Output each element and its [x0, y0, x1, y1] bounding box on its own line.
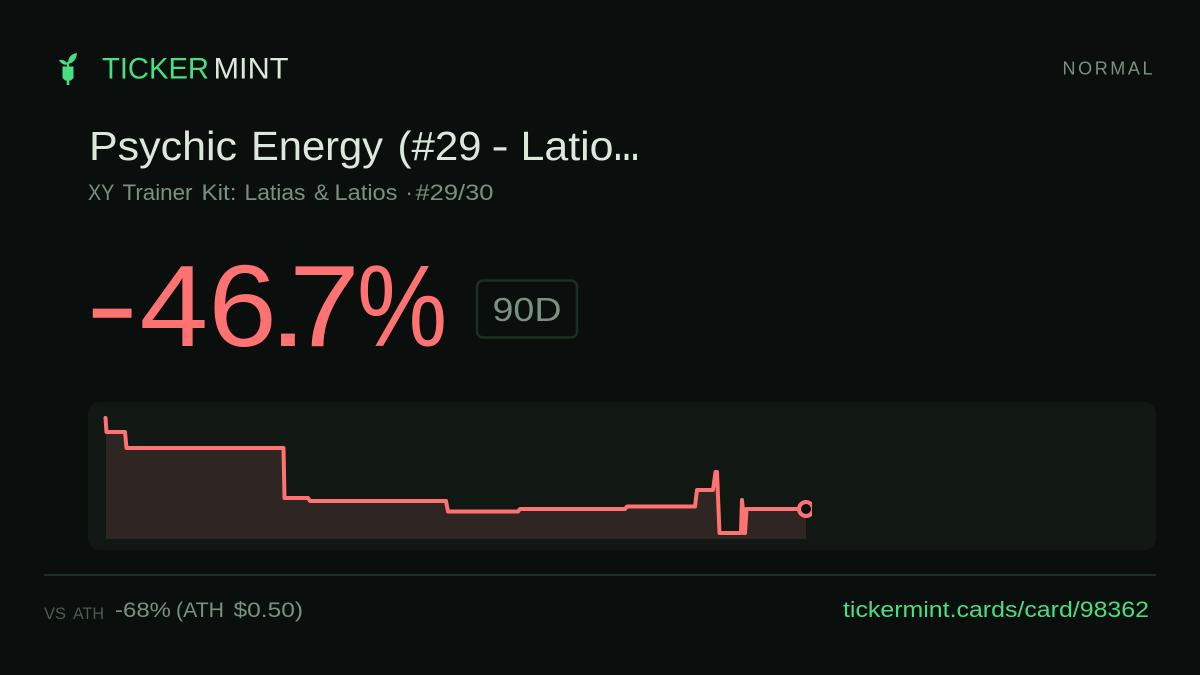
percent change: - — [86, 240, 139, 369]
title: … — [613, 123, 640, 169]
subtitle: Trainer — [122, 180, 192, 205]
title: Latio — [520, 123, 614, 169]
title: (#29 — [398, 123, 482, 169]
percent change — [86, 240, 447, 372]
period badge — [477, 280, 577, 338]
title: Energy — [251, 123, 383, 169]
logo wordmark: TICKER — [102, 52, 209, 86]
panel: price chart — [88, 402, 1156, 550]
chart end marker — [799, 502, 813, 516]
footer link: tickermint.cards/card/98362 — [843, 597, 1149, 622]
footer all-time-high stat: (ATH — [176, 598, 224, 622]
subtitle: Latias — [244, 180, 306, 205]
title: - — [491, 123, 509, 169]
subtitle: · — [406, 180, 413, 205]
divider — [44, 574, 1156, 576]
percent change: % — [357, 242, 447, 372]
footer all-time-high stat: -68% — [115, 598, 171, 622]
percent change: 7 — [289, 241, 360, 371]
icon: sprout plug logo — [59, 53, 77, 85]
subtitle: Kit: — [202, 180, 236, 205]
title: Psychic — [89, 123, 237, 169]
subtitle: Latios — [334, 180, 398, 205]
subtitle: XY — [88, 180, 115, 205]
footer all-time-high stat: $0.50) — [234, 598, 303, 622]
chart price line — [106, 418, 806, 533]
footer label: VS — [44, 604, 66, 623]
period badge: 90D — [492, 291, 562, 328]
percent change: . — [268, 241, 308, 371]
percent change: 46 — [140, 242, 277, 371]
logo wordmark: MINT — [214, 52, 288, 86]
subtitle: #29/30 — [416, 180, 494, 205]
footer label: ATH — [73, 604, 104, 623]
mode label: NORMAL — [1062, 58, 1152, 78]
subtitle: & — [314, 180, 329, 205]
chart area fill — [106, 432, 806, 539]
